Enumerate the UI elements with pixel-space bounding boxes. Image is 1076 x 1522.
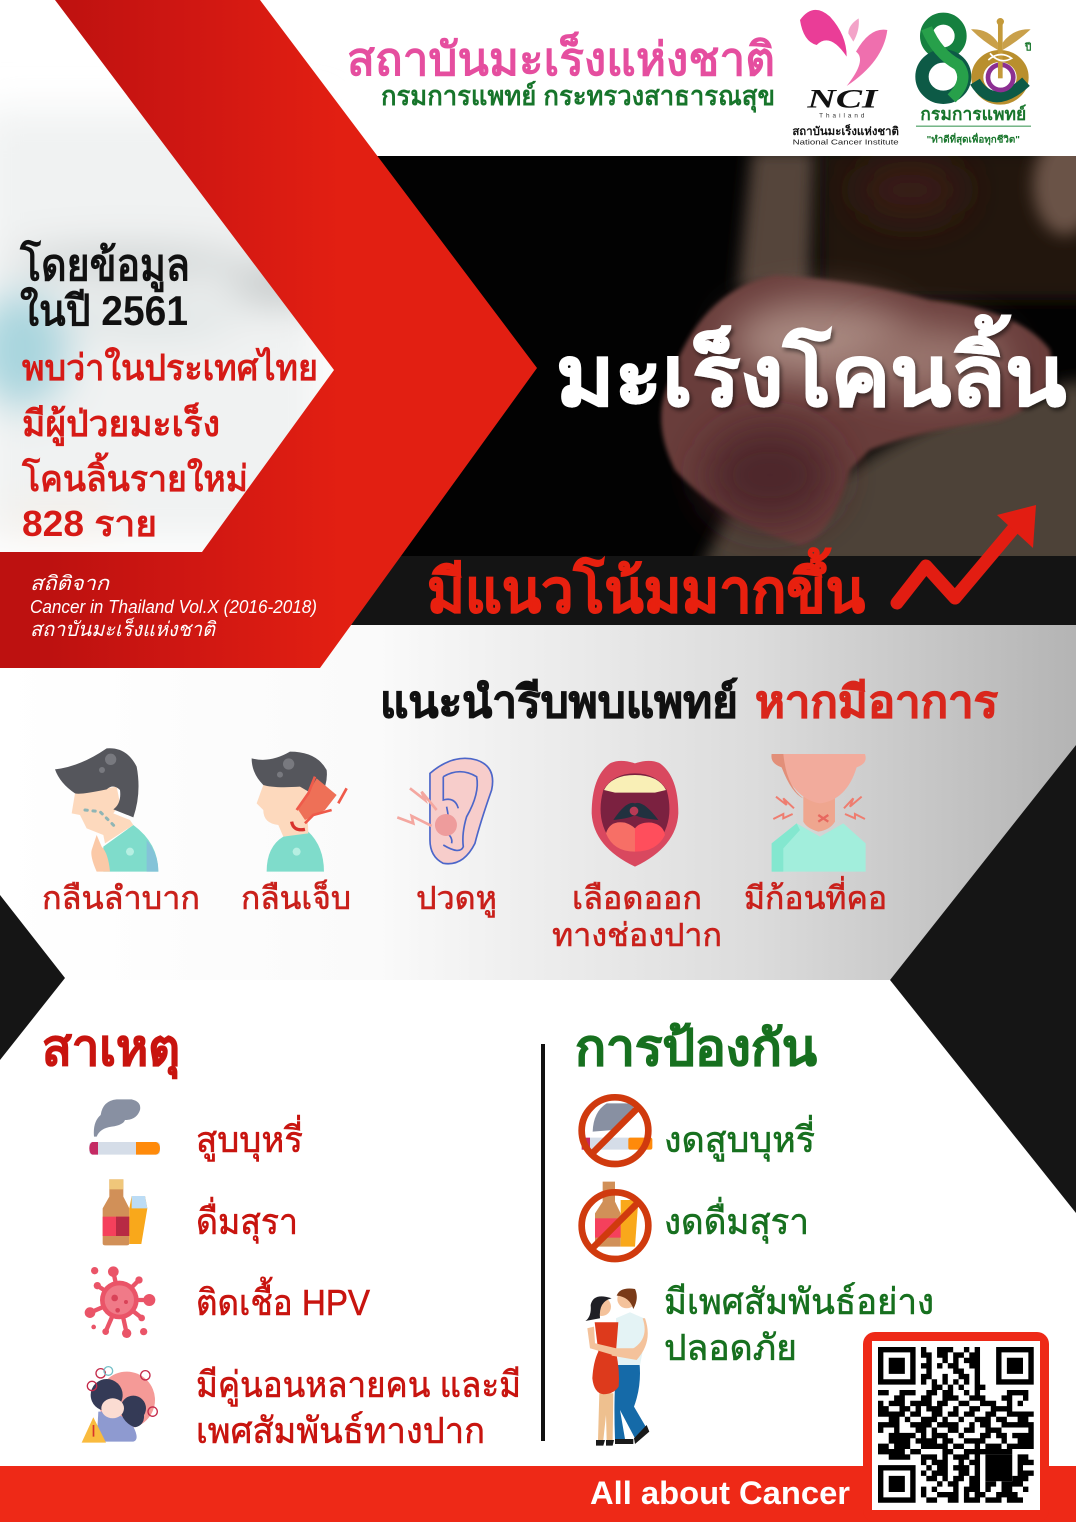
cause labels: ดื่มสุรา bbox=[196, 1197, 298, 1244]
cause labels: ติดเชื้อ HPV bbox=[196, 1276, 370, 1323]
prevention labels: งดสูบบุหรี่ bbox=[664, 1115, 815, 1162]
logo: National Cancer Institute: สถาบันมะเร็งแห่งชาติ bbox=[792, 123, 899, 138]
source note: สถาบันมะเร็งแห่งชาติ bbox=[30, 617, 217, 641]
footer text: All about Cancer bbox=[590, 1475, 850, 1511]
icon: ear pain bbox=[397, 758, 493, 864]
logo: Department of Medical Services 80 years: ปี bbox=[1024, 42, 1031, 54]
symptom labels: กลืนเจ็บ bbox=[241, 879, 351, 916]
icon: bleeding mouth bbox=[592, 761, 678, 867]
header title bbox=[347, 31, 775, 113]
data highlight text bbox=[21, 346, 318, 544]
icon: alcohol bbox=[103, 1179, 147, 1245]
prevention labels: มีเพศสัมพันธ์อย่าง bbox=[664, 1281, 934, 1322]
cause labels: สูบบุหรี่ bbox=[196, 1115, 303, 1162]
logo: Department of Medical Services 80 years: "ทำดีที่สุดเพื่อทุกชีวิต" bbox=[927, 133, 1020, 146]
icon: couple bbox=[585, 1288, 649, 1446]
data intro text: ในปี 2561 bbox=[20, 286, 188, 334]
prevention labels: ปลอดภัย bbox=[664, 1327, 797, 1368]
footer bar bbox=[0, 1466, 1076, 1522]
prevention labels bbox=[664, 1115, 934, 1368]
symptom labels: เลือดออก bbox=[572, 880, 702, 916]
icon: painful swallowing bbox=[252, 752, 347, 872]
heading: causes: สาเหตุ bbox=[42, 1020, 180, 1079]
icon: cigarette bbox=[89, 1099, 160, 1155]
background: blurred hospital photo on left panel bbox=[0, 110, 330, 540]
symptom labels: กลืนลำบาก bbox=[42, 880, 200, 916]
divider bbox=[541, 1044, 545, 1441]
cause labels bbox=[196, 1115, 521, 1451]
source note bbox=[30, 573, 317, 641]
trend text: มีแนวโน้มมากขึ้น bbox=[427, 547, 865, 625]
symptoms heading bbox=[380, 677, 998, 727]
icon: virus bbox=[85, 1266, 155, 1338]
header title: สถาบันมะเร็งแห่งชาติ bbox=[347, 31, 775, 85]
prevention labels: งดดื่มสุรา bbox=[664, 1197, 809, 1244]
main title: มะเร็งโคนลิ้น bbox=[556, 314, 1066, 423]
QR modules bbox=[878, 1350, 1034, 1500]
data highlight text: พบว่าในประเทศไทย bbox=[22, 346, 318, 388]
symptom labels: ทางช่องปาก bbox=[552, 917, 722, 953]
QR code panel bbox=[863, 1332, 1049, 1522]
icon: lump on neck bbox=[771, 754, 866, 872]
icon: no smoking bbox=[582, 1097, 652, 1164]
cause labels: มีคู่นอนหลายคน และมี bbox=[196, 1364, 521, 1407]
logo: National Cancer Institute: Thailand bbox=[819, 112, 867, 119]
trend strip bbox=[350, 556, 1076, 625]
data highlight text: 828 ราย bbox=[22, 503, 157, 544]
icon: multiple partners bbox=[82, 1367, 157, 1443]
logo: Department of Medical Services 80 years: กรมการแพทย์ bbox=[920, 104, 1026, 124]
black triangle right bbox=[890, 745, 1076, 1213]
arrow: rising trend bbox=[897, 505, 1036, 603]
data intro text: โดยข้อมูล bbox=[19, 238, 190, 292]
logo: National Cancer Institute bbox=[792, 10, 899, 147]
cause labels: เพศสัมพันธ์ทางปาก bbox=[196, 1410, 485, 1451]
icon: no alcohol bbox=[582, 1182, 648, 1259]
data highlight text: มีผู้ป่วยมะเร็ง bbox=[22, 401, 220, 447]
heading: prevention: การป้องกัน bbox=[575, 1020, 817, 1076]
source note: สถิติจาก bbox=[30, 573, 110, 595]
logo: National Cancer Institute: NCI bbox=[806, 83, 880, 113]
red chevron bbox=[0, 0, 537, 668]
logo: National Cancer Institute: National Cancer Institute bbox=[793, 140, 899, 147]
symptom labels bbox=[42, 876, 887, 953]
source note: Cancer in Thailand Vol.X (2016-2018) bbox=[30, 597, 317, 617]
symptom labels: มีก้อนที่คอ bbox=[744, 876, 887, 916]
icon: difficulty swallowing bbox=[55, 748, 158, 872]
symptoms band background bbox=[0, 625, 1076, 980]
symptom labels: ปวดหู bbox=[416, 880, 497, 918]
data highlight text: โคนลิ้นรายใหม่ bbox=[21, 452, 248, 499]
logo: Department of Medical Services 80 years bbox=[916, 18, 1031, 146]
black triangle left bbox=[0, 895, 65, 1060]
header title: กรมการแพทย์ กระทรวงสาธารณสุข bbox=[381, 80, 775, 113]
data intro text bbox=[19, 238, 190, 334]
symptoms heading: หากมีอาการ bbox=[755, 678, 998, 727]
symptoms heading: แนะนำรีบพบแพทย์ bbox=[380, 677, 738, 727]
photo panel: tongue bbox=[375, 135, 1076, 570]
